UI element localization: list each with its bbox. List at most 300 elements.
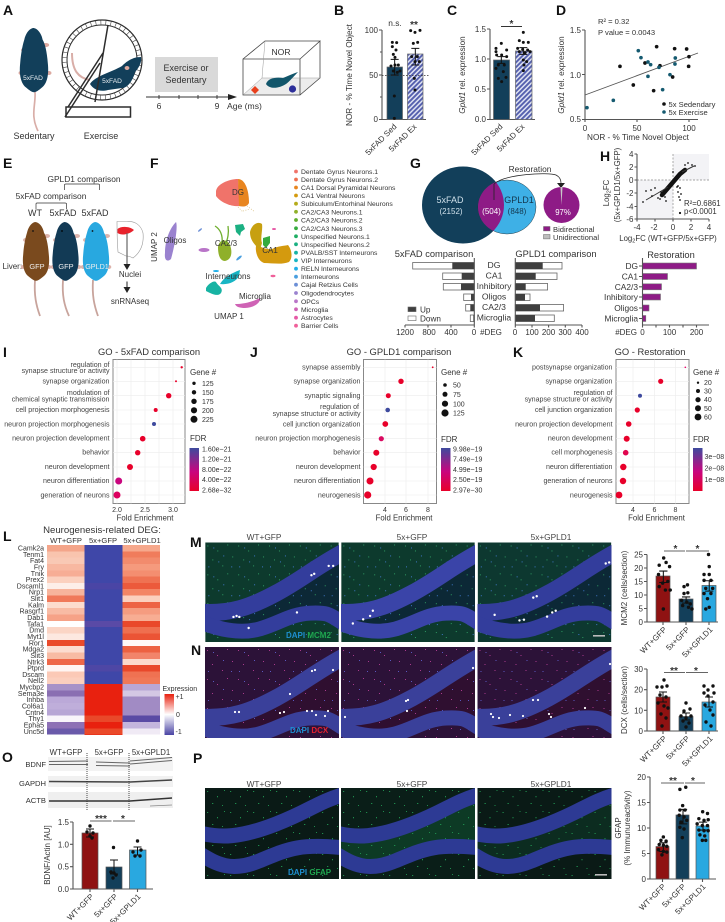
GO term labels [255, 364, 361, 500]
GO term labels: synaptic signaling [304, 392, 361, 400]
GO term labels: neuron development [296, 463, 361, 471]
stats [684, 199, 721, 216]
bar chart: MCM2: 15 [634, 578, 644, 586]
axis titles: Log [602, 193, 611, 206]
bar chart: MCM2: 5x+GFP [664, 625, 692, 652]
bar chart: GFAP: 5 [642, 850, 647, 858]
cluster legend: VIP Interneurons [301, 258, 352, 265]
NOR arena [243, 41, 320, 95]
GO term labels: synapse structure or activity [22, 367, 110, 375]
gene labels: Fry [34, 564, 44, 572]
micrograph: 5x+GFP DCX [341, 647, 475, 738]
category labels: Oligos [482, 292, 506, 302]
column labels: 5x+GPLD1 [531, 779, 572, 789]
bar: 5xFAD Sed [494, 60, 510, 120]
panel: E liver treatment design [2, 155, 149, 316]
bar chart: Restoration DEG counts: CA2/3 [615, 282, 638, 292]
bar chart: 5xFAD DEG counts: Up [420, 306, 431, 314]
bar chart: MCM2: WT+GFP [638, 625, 669, 655]
gene labels: Inhba [26, 697, 44, 704]
bar chart: Restoration DEG counts [604, 258, 709, 337]
legend: gene count: 175 [202, 399, 214, 406]
legend: gene count: 100 [453, 402, 465, 408]
panel letter N: N [191, 642, 201, 658]
title: GO - 5xFAD comparison [98, 346, 200, 357]
cluster legend: Unspecified Neurons.1 [301, 234, 370, 241]
scale bar [593, 635, 605, 637]
dot plot frame [112, 360, 185, 522]
icon: sedentary mouse [18, 28, 52, 131]
legend: gene count: 75 [453, 392, 461, 399]
legend: FDR: FDR [190, 434, 207, 443]
legend: gene count: 125 [202, 381, 214, 388]
scale bar [595, 874, 607, 876]
bar chart: GFAP [614, 773, 716, 916]
legend [662, 100, 716, 117]
category labels [477, 260, 512, 337]
axes: 0 [374, 115, 379, 124]
GO points [364, 366, 434, 499]
cluster legend: Interneurons [301, 274, 340, 281]
label: Sedentary: Sedentary [13, 131, 55, 141]
GO term labels: behavior [333, 448, 361, 456]
expression legend: 0 [176, 712, 180, 719]
data points and error bars [389, 29, 421, 120]
gene labels: Dscaml1 [17, 583, 44, 590]
panel letter J: J [250, 344, 258, 360]
bar: 5xFAD Ex [408, 54, 423, 120]
panel: H log fold-change scatter [600, 147, 721, 244]
bar chart: MCM2: * [696, 544, 700, 555]
GO term labels: cell morphogenesis [551, 448, 613, 456]
cluster labels: Interneurons [206, 272, 250, 281]
dot plot frame: 6 [404, 507, 408, 514]
gene labels: Tafa1 [27, 621, 44, 628]
zero lines [637, 154, 709, 219]
bar chart: BDNF/Actin [43, 814, 153, 922]
cluster labels: DG [232, 188, 244, 197]
pie chart 97%: 97% [555, 208, 571, 217]
timeline arrow: 6 [157, 101, 162, 111]
gene labels: Col6a1 [22, 704, 44, 710]
bar chart: DCX: 20 [634, 686, 644, 695]
axes: 0.5 [570, 115, 582, 124]
GO term labels [515, 364, 613, 500]
micrograph: 5x+GFP GFAP [341, 788, 475, 879]
panel: G DEG overlap [395, 155, 709, 337]
axes: 0 [671, 223, 676, 232]
GO term labels: synapse structure or activity [273, 410, 361, 418]
panel: C Gpld1 expression chart [447, 2, 535, 157]
bar chart: Restoration DEG counts: 200 [690, 328, 704, 337]
column labels: WT+GFP [50, 748, 82, 757]
column labels: 5x+GFP [89, 536, 117, 545]
column labels: 5x+GPLD1 [132, 748, 170, 757]
cluster legend: Unspecified Neurons.2 [301, 242, 370, 249]
column labels: 5x+GFP [95, 748, 123, 757]
axis titles: FC [602, 179, 611, 190]
gene labels: Epha5 [24, 722, 44, 730]
column labels: 5x+GFP [397, 532, 428, 542]
legend: FDR [190, 434, 231, 494]
x labels [364, 122, 419, 157]
y axis title: Gpld1 rel. expression [458, 36, 467, 114]
panel: N DCX staining [191, 642, 718, 768]
legend: gene count: 20 [704, 380, 712, 387]
x labels: 5xFAD Ex [387, 122, 419, 154]
icon: WT GFP mouse [21, 222, 51, 316]
GO term labels: postsynapse organization [532, 364, 613, 372]
label: Liver: Liver: [2, 262, 22, 271]
dot plot frame: 4 [383, 507, 387, 514]
gene labels: Mycbp2 [19, 684, 44, 692]
category labels: Inhibitory [477, 281, 512, 291]
bar chart: Restoration DEG counts: CA1 [622, 272, 638, 282]
dot plot frame: 2.5 [140, 507, 150, 514]
cluster labels: Oligos [164, 236, 186, 245]
legend: FDR: 3e−08 [704, 454, 724, 461]
gene labels: Ntrk3 [27, 659, 44, 666]
bar chart: DCX: DCX (cells/section) [620, 666, 629, 734]
bar chart: MCM2: 5 [639, 604, 644, 614]
bar chart: BDNF/Actin: BDNF/Actin [AU] [43, 825, 52, 885]
cluster legend: RELN Interneurons [301, 266, 360, 273]
cluster legend: CA1 Dorsal Pyramidal Neurons [301, 185, 396, 192]
cluster legend: Dentate Gyrus Neurons.1 [301, 169, 378, 176]
bar chart: MCM2: 10 [634, 591, 644, 600]
labelled cells in MCM2 images [232, 561, 610, 629]
bar chart: BDNF/Actin: *** [95, 814, 107, 825]
gene labels: Tnik [31, 571, 44, 578]
cluster legend: Astrocytes [301, 315, 333, 322]
icon: running wheel with mouse: 5xFAD [102, 78, 122, 85]
panel letter E: E [3, 155, 12, 171]
cluster legend [294, 169, 396, 330]
cluster legend: OPCs [301, 299, 320, 306]
panel letter C: C [447, 2, 457, 18]
bar chart: BDNF/Actin: 1.5 [58, 818, 70, 827]
bar chart: BDNF/Actin: 0.5 [58, 863, 70, 872]
cluster legend: Microglia [301, 307, 328, 314]
bar chart: GFAP: WT+GFP [637, 882, 668, 912]
panel: P GFAP staining [193, 750, 716, 916]
GO term labels: behavior [82, 448, 110, 456]
axes: -2 [650, 223, 658, 232]
gene labels: Slit3 [30, 653, 44, 660]
bar chart: MCM2 [620, 544, 718, 659]
pie legend: Unidirectional [553, 233, 599, 242]
data points [585, 45, 691, 109]
restoration arrow: Restoration [509, 164, 552, 174]
bar chart: DCX: 5x+GFP [664, 734, 692, 761]
venn diagram: (504) [482, 207, 501, 216]
gene labels: Prex2 [26, 577, 44, 584]
cluster legend: PVALB/SST Interneurons [301, 250, 378, 257]
legend: FDR: 1.20e−21 [202, 456, 231, 464]
dot plot frame: 6 [653, 507, 657, 514]
panel: L heatmap [3, 525, 197, 736]
GO points [616, 366, 686, 498]
bar chart: 5xFAD DEG counts [396, 258, 477, 337]
stats: R²=0.6861 [684, 199, 721, 208]
gene labels: Slit1 [30, 596, 44, 603]
panel letter O: O [2, 749, 13, 765]
micrograph: 5x+GPLD1 GFAP [478, 788, 612, 879]
quadrant shading [637, 154, 709, 219]
stain label DAPI MCM2: DAPI MCM2 [286, 631, 331, 640]
legend: gene count: 200 [202, 408, 214, 415]
axis titles: 2 [606, 190, 612, 193]
cluster labels: UMAP 1 [214, 312, 244, 321]
box: Exercise or Sedentary: Sedentary [165, 75, 207, 85]
icon: brain section and nuclei arrows: snRNAseq [111, 297, 149, 306]
legend: gene count: 60 [704, 414, 712, 422]
scatter cloud [642, 162, 696, 214]
blot labels: BDNF [25, 760, 46, 769]
micrograph: WT+GFP DCX [205, 647, 339, 738]
panel letter G: G [410, 155, 421, 171]
axes: 100 [365, 26, 379, 35]
micrograph: WT+GFP GFAP [205, 788, 339, 879]
icon: running wheel with mouse [62, 20, 142, 117]
axes: 0 [629, 176, 634, 185]
y axis title: Gpld1 rel. expression [557, 36, 566, 114]
legend: gene count: 150 [202, 390, 214, 397]
GO term labels: generation of neurons [543, 477, 613, 485]
panel: I GO 5xFAD comparison [3, 344, 231, 522]
bar chart: MCM2: * [674, 544, 678, 555]
icon: 5xFAD GPLD1 mouse: GPLD1 [85, 262, 109, 271]
axes: 50 [633, 124, 642, 133]
panel letter F: F [150, 155, 159, 171]
stats: p<0.0001 [684, 207, 717, 216]
gene labels: Ptprd [27, 666, 44, 673]
micrograph: 5x+GFP MCM2 [341, 542, 475, 642]
title: GO - Restoration [615, 346, 685, 357]
bar chart: GPLD1 DEG counts: 300 [558, 328, 572, 337]
column labels: 5x+GFP [397, 779, 428, 789]
legend: gene count: Gene # [693, 368, 720, 377]
gene labels: Fat4 [30, 558, 44, 565]
legend: gene count [441, 368, 468, 418]
dot plot frame: 8 [674, 507, 678, 514]
pie legend [544, 225, 599, 242]
panel: M MCM2 staining [190, 532, 718, 659]
stats: P value = 0.0043 [598, 28, 655, 37]
dot plot frame: Fold Enrichment [628, 514, 686, 522]
axis titles [602, 147, 717, 244]
bar chart: GFAP: 10 [637, 824, 647, 833]
dot plot frame: Fold Enrichment [117, 514, 174, 522]
axes: 2 [689, 223, 694, 232]
bar chart: 5xFAD DEG counts: 400 [444, 328, 458, 337]
icon: brain section and nuclei arrows: Nuclei [119, 270, 141, 279]
bar chart: GPLD1 DEG counts: 100 [525, 328, 539, 337]
bar chart: Restoration DEG counts: Microglia [604, 314, 638, 324]
GO term labels: cell junction organization [535, 406, 613, 414]
gene labels: Thy1 [28, 716, 44, 723]
GO term labels: synapse assembly [302, 364, 361, 372]
significance labels: n.s. [388, 18, 402, 28]
axes [626, 150, 712, 232]
category labels: CA2/3 [482, 302, 506, 312]
axis titles: FC (WT+GFP/5x+GFP) [635, 234, 717, 243]
dot plot frame [364, 360, 436, 522]
bar chart: GPLD1 DEG counts: 0 [513, 328, 518, 337]
comparison brackets [16, 174, 121, 218]
bar chart: MCM2: 25 [634, 550, 644, 560]
venn diagram: (2152) [439, 207, 463, 216]
bar chart: 5xFAD DEG counts: 1200 [396, 328, 414, 337]
category labels: #DEG [480, 328, 502, 337]
bar chart: Restoration DEG counts: DG [625, 261, 638, 271]
title: GO - GPLD1 comparison [347, 346, 451, 357]
GO term labels: neuron development [548, 434, 613, 442]
GO term labels: regulation of [70, 361, 110, 369]
bar chart: DCX: ** [670, 666, 678, 677]
legend: gene count: 50 [704, 406, 712, 413]
legend: gene count: 125 [453, 410, 465, 418]
icon: 5xFAD GPLD1 mouse [81, 222, 111, 316]
category labels: DG [488, 260, 501, 270]
legend: gene count [190, 368, 217, 424]
cluster legend: Oligodendrocytes [301, 290, 354, 298]
bar chart: 5xFAD DEG counts: Down [420, 314, 441, 324]
panel: K GO Restoration [513, 344, 724, 522]
bar chart: 5xFAD DEG counts: 800 [422, 328, 436, 337]
heading: GPLD1 comparison: GPLD1 comparison [515, 249, 597, 259]
bar: 5xFAD Ex [516, 51, 532, 120]
dot plot frame [616, 360, 689, 522]
heading: 5xFAD comparison: 5xFAD comparison [395, 249, 473, 259]
dot plot frame: Fold Enrichment [376, 514, 433, 522]
panel letter A: A [3, 2, 13, 18]
GO term labels: synapse organization [42, 378, 110, 386]
GO term labels: neurogenesis [570, 492, 613, 500]
bar chart: 5xFAD DEG counts: 0 [472, 328, 477, 337]
panel letter M: M [190, 534, 202, 550]
gene labels: Ror1 [29, 640, 44, 647]
legend: FDR: 8.00e−22 [202, 467, 231, 474]
significance bar: * [510, 19, 514, 30]
legend: gene count: 50 [453, 382, 461, 390]
axes: 1.5 [570, 26, 582, 35]
GO term labels: neuron projection development [12, 434, 110, 442]
GO term labels: modulation of [67, 389, 110, 397]
NOR arena: NOR [271, 47, 291, 57]
column labels [50, 748, 170, 757]
cluster legend: CA2/CA3 Neurons.3 [301, 226, 363, 233]
axes [570, 26, 698, 142]
panel: D scatter plot [556, 2, 716, 142]
axes: -4 [633, 223, 641, 232]
comparison brackets: 5xFAD comparison [16, 191, 87, 201]
axes: NOR - % Time Novel Object [587, 133, 690, 142]
legend: 5x Sedendary [668, 100, 716, 109]
stain label DAPI DCX: DAPI DCX [290, 726, 329, 735]
gene labels: Camk2a [18, 546, 44, 552]
GO points [114, 366, 183, 498]
axes: 100 [682, 124, 696, 133]
micrograph: 5x+GPLD1 MCM2 [478, 542, 612, 642]
bar chart: MCM2: MCM2 (cells/section) [620, 550, 629, 625]
comparison brackets: WT [28, 208, 42, 218]
expression legend: Expression [162, 686, 197, 693]
dot plot frame: 3.0 [168, 507, 178, 514]
column labels: WT+GFP [50, 536, 82, 545]
cluster legend: CA2/CA3 Neurons.1 [301, 209, 363, 216]
chance dotted line [382, 74, 430, 76]
legend: FDR [441, 435, 482, 494]
GO term labels: neuron projection development [515, 420, 613, 428]
expression legend: +1 [176, 694, 184, 701]
GO term labels: synapse structure or activity [525, 396, 613, 404]
column labels: 5x+GPLD1 [531, 532, 572, 542]
legend: FDR: 2.97e−30 [453, 488, 482, 494]
axis titles: (5x+GPLD1/5x+GFP) [613, 147, 622, 222]
gene labels: Unc5d [24, 729, 44, 736]
axes: -4 [626, 202, 634, 212]
axes [365, 26, 426, 124]
panel: O western blot [2, 748, 173, 922]
stats [598, 17, 655, 37]
gene labels: Kalm [28, 602, 44, 609]
panel: B NOR bar chart [334, 2, 430, 157]
legend: 5x Exercise [668, 108, 708, 117]
column labels: WT+GFP [247, 779, 282, 789]
legend: FDR: 4.00e−22 [202, 477, 231, 484]
GO term labels: neuron development [45, 463, 110, 471]
GO term labels: neuron differentiation [43, 477, 110, 485]
bar chart: MCM2: 20 [634, 564, 644, 573]
bar: 5xFAD Sed [387, 67, 402, 120]
axes: 0 [583, 124, 588, 133]
x labels [470, 122, 527, 157]
panel letter D: D [556, 2, 566, 18]
bar chart: GFAP: GFAP [614, 817, 623, 839]
comparison brackets: 5xFAD [49, 208, 77, 218]
GO term labels: neuron differentiation [546, 463, 613, 471]
x labels: 5xFAD Sed [470, 122, 505, 157]
panel: F UMAP [150, 155, 396, 330]
timeline arrow: Age (ms) [227, 101, 262, 111]
bar chart: GFAP: 15 [637, 798, 647, 808]
gene labels: Myt1l [27, 634, 44, 641]
micrograph: WT+GFP MCM2 [205, 542, 339, 642]
GO term labels: neurogenesis [318, 492, 361, 500]
cluster labels [150, 188, 278, 321]
bar chart: GFAP: 20 [637, 773, 647, 782]
timeline arrow [146, 94, 262, 111]
legend: FDR: 4.99e−19 [453, 467, 482, 474]
GO term labels: neuron projection morphogenesis [255, 434, 361, 442]
gene labels: Cntn4 [25, 710, 44, 717]
column labels [247, 532, 572, 542]
gene labels: Sema3e [18, 691, 44, 698]
labelled cells in DCX images [234, 663, 611, 719]
axes: -6 [626, 215, 634, 224]
bar chart: DCX: 0 [639, 727, 644, 736]
column labels [50, 536, 161, 545]
bar chart: DCX: 30 [634, 665, 644, 674]
heading: Restoration: Restoration [647, 250, 695, 260]
icon: WT GFP mouse: GFP [29, 262, 45, 271]
column labels: 5x+GPLD1 [123, 536, 161, 545]
bar chart: BDNF/Actin: WT+GFP [65, 892, 96, 922]
GO term labels: synapse organization [545, 378, 613, 386]
GO term labels: neuron projection morphogenesis [4, 420, 110, 428]
cluster labels: CA2/3 [215, 239, 238, 248]
